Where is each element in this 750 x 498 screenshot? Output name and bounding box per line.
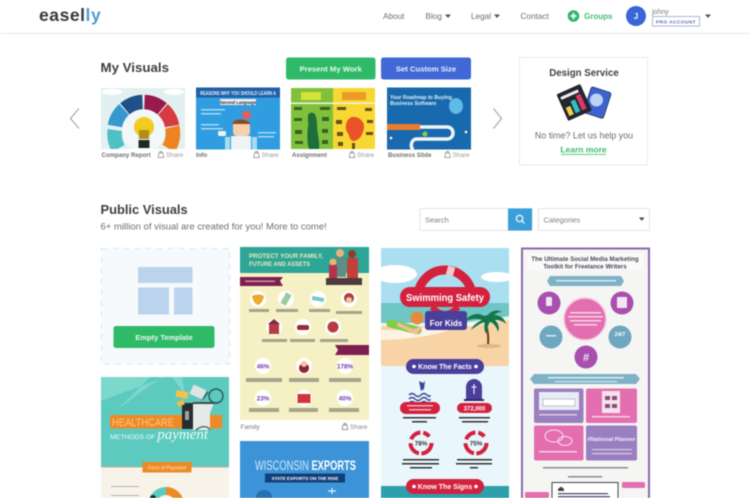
thumbnail: business slide [387, 88, 471, 150]
drowning icon [409, 381, 430, 404]
card: social media toolkit [522, 248, 649, 498]
tile: grid [586, 388, 637, 423]
methods of payment text: METHODS OF payment [110, 427, 209, 443]
search box: Search [425, 216, 449, 224]
label: info [196, 152, 279, 159]
thumbnail: company report [101, 88, 185, 152]
user account badge: johny [651, 9, 669, 16]
stat row two: 40% [339, 396, 352, 402]
icon row two [266, 319, 341, 335]
stat row one: 46% [257, 364, 270, 370]
stat pills [400, 402, 492, 422]
label: company report [102, 152, 183, 159]
arrow: carousel next [494, 108, 502, 128]
design service heading: Design Service [549, 68, 619, 79]
thumbnail: info: Second Language [220, 100, 257, 105]
stat row one [255, 358, 353, 374]
know the facts pill: Know The Facts [418, 364, 472, 371]
healthcare banner [110, 415, 222, 429]
groups link [568, 10, 613, 22]
life ring [418, 270, 472, 314]
label: assignment: Share [357, 152, 374, 159]
link: learn more: Learn more [560, 144, 607, 154]
toolkit title: Toolkit for Freelance Writers [543, 264, 627, 270]
thumbnail: business slide: Business Software [390, 101, 437, 107]
palm tree [465, 311, 506, 348]
card: protect your family [240, 247, 369, 420]
hub diagram [538, 292, 634, 368]
tile: national planner: #National Planner [587, 437, 636, 443]
ribbon: lower section [335, 345, 369, 355]
thumbnail: info: REASONS WHY YOU SHOULD LEARN A [200, 91, 276, 97]
donut chart [111, 486, 180, 498]
label: family [240, 424, 368, 431]
hub diagram: # [583, 352, 589, 364]
gravestone icon [464, 379, 484, 401]
design service tagline: No time? Let us help you [535, 130, 633, 140]
button: present my work [286, 58, 376, 80]
card: protect your family: FUTURE AND ASSETS [249, 261, 311, 268]
button: set custom size: Set Custom Size [396, 64, 457, 74]
percent rings: 78% [415, 440, 428, 448]
logo: easelly [39, 5, 101, 25]
card: wisconsin exports: WISCONSIN EXPORTS [255, 458, 356, 473]
percent rings [410, 432, 486, 454]
know the signs pill [406, 479, 484, 494]
user account badge [651, 9, 711, 26]
swimming safety title: Swimming Safety [406, 293, 484, 304]
label: info: Share [262, 152, 279, 159]
heading: my visuals: My Visuals [100, 60, 169, 75]
percent rings: 75% [470, 440, 483, 448]
lower section band [381, 486, 509, 498]
card: protect your family: PROTECT YOUR FAMILY, [249, 253, 323, 260]
nav links: Legal [471, 12, 491, 21]
user avatar [626, 6, 646, 26]
small caption lines [246, 309, 362, 412]
ribbon one [547, 276, 624, 286]
for kids badge: For Kids [430, 319, 463, 328]
label: family: Share [350, 424, 368, 431]
template layout icon [138, 267, 192, 314]
thumbnail: business slide: Your Roadmap to Buying [390, 95, 452, 101]
card: empty template [102, 248, 230, 364]
icon: design documents [556, 84, 611, 121]
button: present my work: Present My Work [300, 64, 363, 74]
label: assignment [292, 152, 374, 159]
categories dropdown: Categories [544, 216, 580, 224]
ribbon two [530, 374, 640, 384]
toolkit caption lines [543, 467, 628, 478]
nav links: Blog [426, 12, 442, 21]
orange tag: Form of Payment [148, 466, 187, 472]
label: assignment: Assignment [292, 152, 327, 159]
tile: national planner [586, 426, 637, 460]
card: healthcare methods of payment [101, 377, 229, 498]
arrow: carousel previous [70, 108, 79, 128]
stat row two [255, 390, 353, 406]
button: empty template: Empty Template [135, 333, 193, 342]
label: company report: Share [166, 152, 183, 159]
post screenshot [552, 482, 618, 498]
beach scene [373, 248, 513, 366]
swimming child [386, 312, 424, 335]
card: wisconsin exports [240, 441, 369, 498]
heading: public visuals: Public Visuals [100, 202, 188, 217]
toolkit title: The Ultimate Social Media Marketing [531, 256, 639, 263]
label: business slide [388, 152, 470, 159]
groups link: Groups [584, 12, 613, 21]
label: family: Family [240, 424, 260, 431]
pink tags [525, 482, 645, 498]
tile: chat [534, 426, 584, 460]
search button [508, 208, 532, 230]
stat row one: 178% [337, 364, 353, 370]
label: info: Info [196, 152, 207, 159]
orange tag [142, 462, 192, 472]
stat row two: 23% [257, 396, 270, 402]
user avatar: J [634, 12, 638, 21]
search box [420, 208, 532, 230]
hub diagram: 24/7 [615, 332, 625, 338]
panel: design service [520, 58, 648, 165]
know the signs pill: Know The Signs [418, 484, 472, 491]
percent captions [402, 459, 492, 468]
label: business slide: Business Slide [388, 152, 432, 159]
user account badge: PRO ACCOUNT [656, 20, 696, 26]
nav links: Contact [520, 12, 549, 21]
label: business slide: Share [452, 152, 470, 159]
toolkit title [527, 253, 643, 270]
know the facts pill [406, 359, 484, 374]
top navigation bar [0, 5, 750, 34]
button: set custom size [381, 58, 471, 80]
stat pills: 372,000 [464, 406, 486, 412]
ribbon: upper section [240, 277, 283, 286]
subtitle: 6+ million of visual are created for you! More to come! [100, 222, 327, 232]
nav links: About [383, 12, 405, 21]
healthcare banner: HEALTHCARE [112, 417, 174, 429]
swimming safety title [400, 287, 490, 307]
state exports banner: STATE EXPORTS ON THE RISE [272, 476, 338, 481]
nav links [383, 12, 549, 21]
label: company report: Company Report [102, 152, 151, 159]
card: swimming safety [373, 248, 513, 498]
for kids badge [425, 311, 467, 330]
thumbnail: info [196, 88, 280, 150]
icon row one [250, 291, 357, 307]
tile: profile [534, 388, 584, 423]
thumbnail: assignment [291, 88, 375, 149]
medical illustration [175, 385, 223, 430]
family illustration [326, 249, 362, 285]
categories dropdown [538, 208, 650, 230]
